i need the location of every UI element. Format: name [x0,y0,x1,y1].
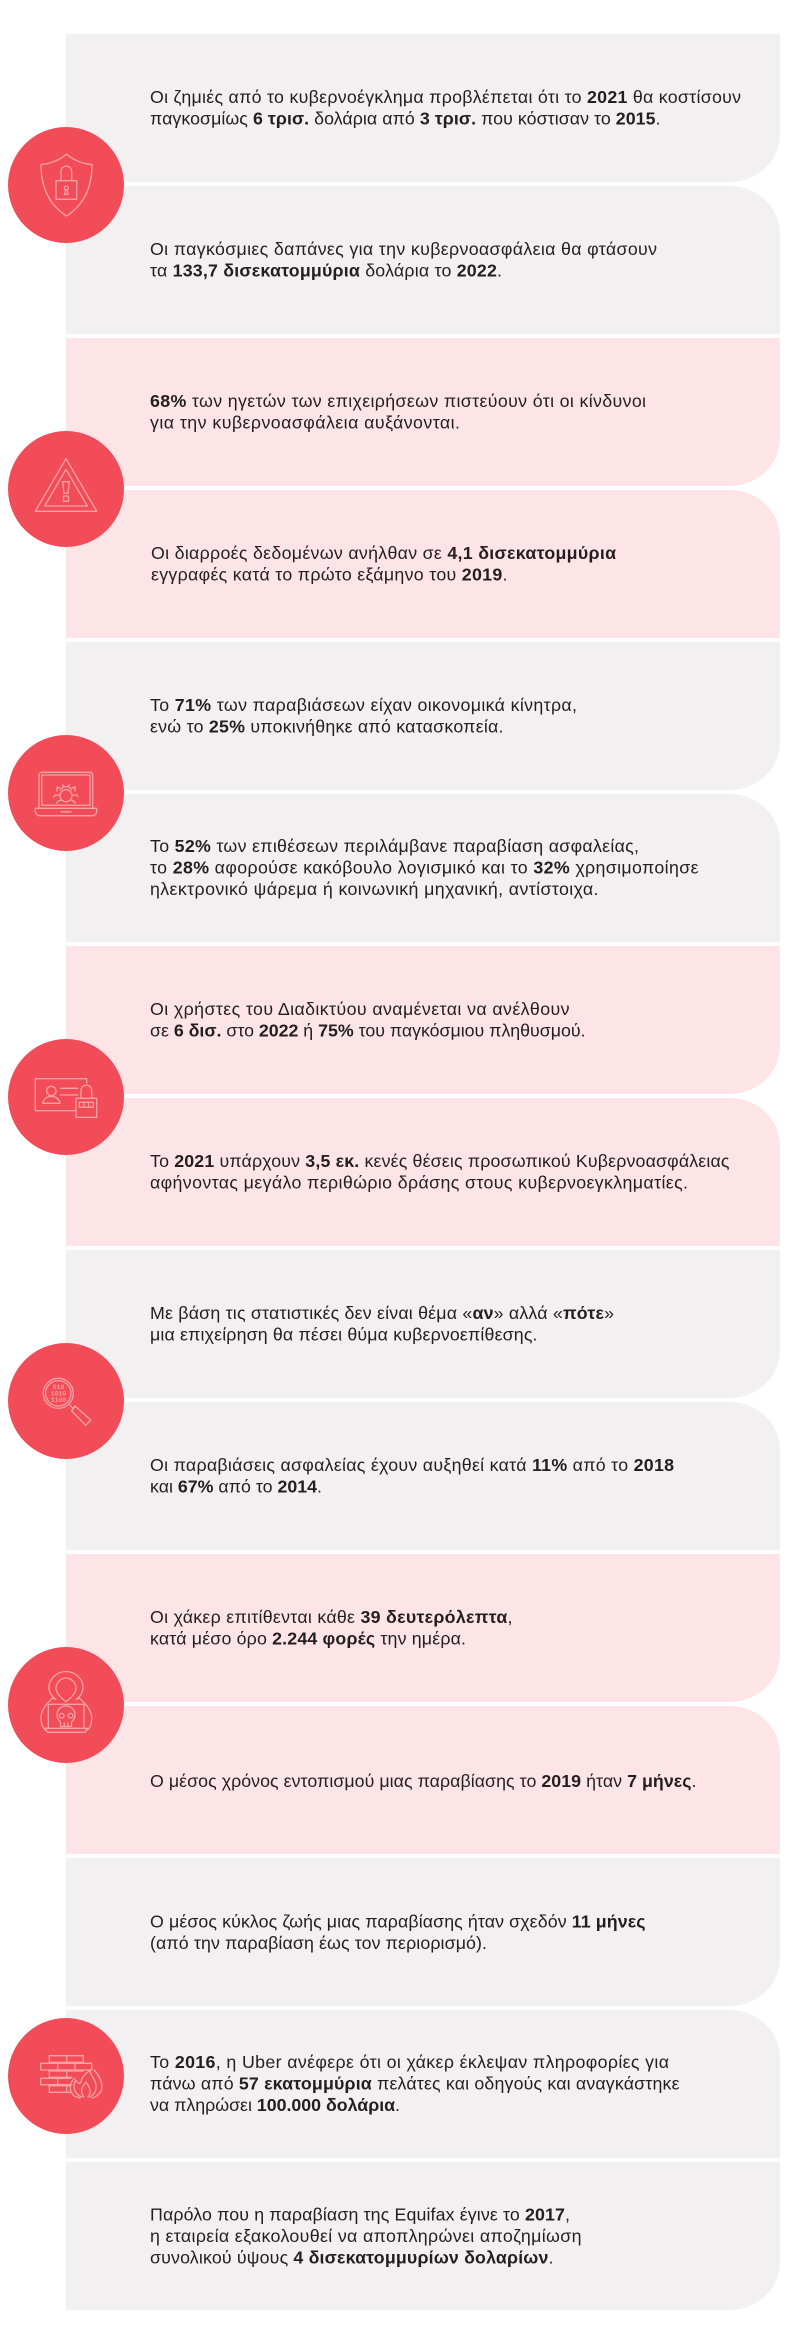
panel background [66,34,780,182]
panel: vacant positions [66,1098,780,1246]
statistic text: Το 52% των επιθέσεων περιλάμβανε παραβίαση ασφαλείας, [150,836,639,856]
statistic text: Οι παγκόσμιες δαπάνες για την κυβερνοασφάλεια θα φτάσουν [150,239,657,259]
panel: business leaders [66,338,780,486]
panel background [66,1250,780,1398]
statistic text: 68% των ηγετών των επιχειρήσεων πιστεύουν ότι οι κίνδυνοι [150,391,646,411]
statistic text: Οι διαρροές δεδομένων ανήλθαν σε 4,1 δισεκατομμύρια [151,543,616,563]
statistic text [150,695,577,736]
icon: warning triangle [8,431,124,547]
panel: detection time [66,1706,780,1854]
statistic text [150,999,586,1040]
icon: shield with padlock [8,127,124,243]
icon: brick wall with flame [8,2018,124,2134]
panel background [66,186,780,334]
icon: hooded hacker with skull laptop [8,1647,124,1763]
statistic text [150,2204,582,2268]
statistic text: ηλεκτρονικό ψάρεμα ή κοινωνική μηχανική, αντίστοιχα. [150,879,598,899]
icon: magnifying glass over binary: 010 [53,1384,64,1391]
panel: cybercrime damages [66,34,780,182]
statistic text: και 67% από το 2014. [150,1476,322,1496]
statistic text [150,2052,680,2115]
statistic text [150,1607,512,1648]
statistic text: Οι χρήστες του Διαδικτύου αναμένεται να ανέλθουν [150,999,570,1019]
statistic text: Οι παραβιάσεις ασφαλείας έχουν αυξηθεί κατά 11% από το 2018 [150,1455,674,1475]
icon: magnifying glass over binary: 1100 [51,1397,66,1404]
statistic text: εγγραφές κατά το πρώτο εξάμηνο του 2019. [151,564,508,584]
panel background [66,1554,780,1702]
statistic text: πάνω από 57 εκατομμύρια πελάτες και οδηγούς και αναγκάστηκε [150,2074,680,2094]
statistic text: για την κυβερνοασφάλεια αυξάνονται. [150,412,460,432]
statistic text: μια επιχείρηση θα πέσει θύμα κυβερνοεπίθεσης. [150,1324,538,1344]
panel background [66,2162,780,2310]
panel: breach motives [66,642,780,790]
statistic text: ενώ το 25% υποκινήθηκε από κατασκοπεία. [150,716,504,736]
statistic text: η εταιρεία εξακολουθεί να αποπληρώνει αποζημίωση [150,2226,582,2246]
statistic text: Με βάση τις στατιστικές δεν είναι θέμα «αν» αλλά «πότε» [150,1303,614,1323]
statistic text: Ο μέσος χρόνος εντοπισμού μιας παραβίασης το 2019 ήταν 7 μήνες. [150,1771,696,1791]
icon: laptop with bug [8,735,124,851]
statistic text: σε 6 δισ. στο 2022 ή 75% του παγκόσμιου πληθυσμού. [150,1020,586,1040]
panel: internet users [66,946,780,1094]
statistic text: Ο μέσος κύκλος ζωής μιας παραβίασης ήταν σχεδόν 11 μήνες [150,1912,646,1932]
panel: not if but when [66,1250,780,1398]
panel background [66,794,780,942]
statistic text [150,836,699,899]
icon: ID card with padlock [8,1039,124,1155]
panel background [66,2010,780,2158]
panel background [66,1402,780,1550]
panel: breach lifecycle [66,1858,780,2006]
statistic text: Οι χάκερ επιτίθενται κάθε 39 δευτερόλεπτα, [150,1607,512,1627]
icon: magnifying glass over binary [8,1343,124,1459]
statistic text [150,1455,674,1496]
statistic text [150,1151,730,1192]
statistic text [150,1303,614,1344]
statistic text: Οι ζημιές από το κυβερνοέγκλημα προβλέπεται ότι το 2021 θα κοστίσουν [150,87,741,107]
panel: attack frequency [66,1554,780,1702]
statistic text [150,391,646,432]
statistic text: να πληρώσει 100.000 δολάρια. [150,2095,400,2115]
panel: Uber breach [66,2010,780,2158]
statistic text: το 28% αφορούσε κακόβουλο λογισμικό και το 32% χρησιμοποίησε [150,858,699,878]
panel: Equifax breach [66,2162,780,2310]
statistic text [150,239,657,280]
panel background [66,946,780,1094]
statistic text [150,1912,646,1953]
panel background [66,338,780,486]
panel background [66,1706,780,1854]
statistic text: συνολικού ύψους 4 δισεκατομμυρίων δολαρίων. [150,2248,554,2268]
panel: data leaks [66,490,780,638]
statistic text: Το 2021 υπάρχουν 3,5 εκ. κενές θέσεις προσωπικού Κυβερνοασφάλειας [150,1151,730,1171]
statistic text: (από την παραβίαση έως τον περιορισμό). [150,1933,487,1953]
panel: breach growth [66,1402,780,1550]
panel: attack types [66,794,780,942]
statistic text: τα 133,7 δισεκατομμύρια δολάρια το 2022. [150,260,502,280]
icon: magnifying glass over binary: 1010 [51,1390,66,1398]
statistic text: Παρόλο που η παραβίαση της Equifax έγινε το 2017, [150,2204,570,2224]
panel background [66,490,780,638]
statistic text: Το 2016, η Uber ανέφερε ότι οι χάκερ έκλεψαν πληροφορίες για [150,2052,669,2072]
panel background [66,642,780,790]
statistic text [150,87,741,128]
panel background [66,1098,780,1246]
panel: global cybersecurity spending [66,186,780,334]
statistic text: παγκοσμίως 6 τρισ. δολάρια από 3 τρισ. που κόστισαν το 2015. [150,108,660,128]
panel background [66,1858,780,2006]
statistic text: αφήνοντας μεγάλο περιθώριο δράσης στους κυβερνοεγκληματίες. [150,1172,688,1192]
statistic text: Το 71% των παραβιάσεων είχαν οικονομικά κίνητρα, [150,695,577,715]
statistic text: κατά μέσο όρο 2.244 φορές την ημέρα. [150,1628,466,1648]
statistic text [151,543,616,584]
